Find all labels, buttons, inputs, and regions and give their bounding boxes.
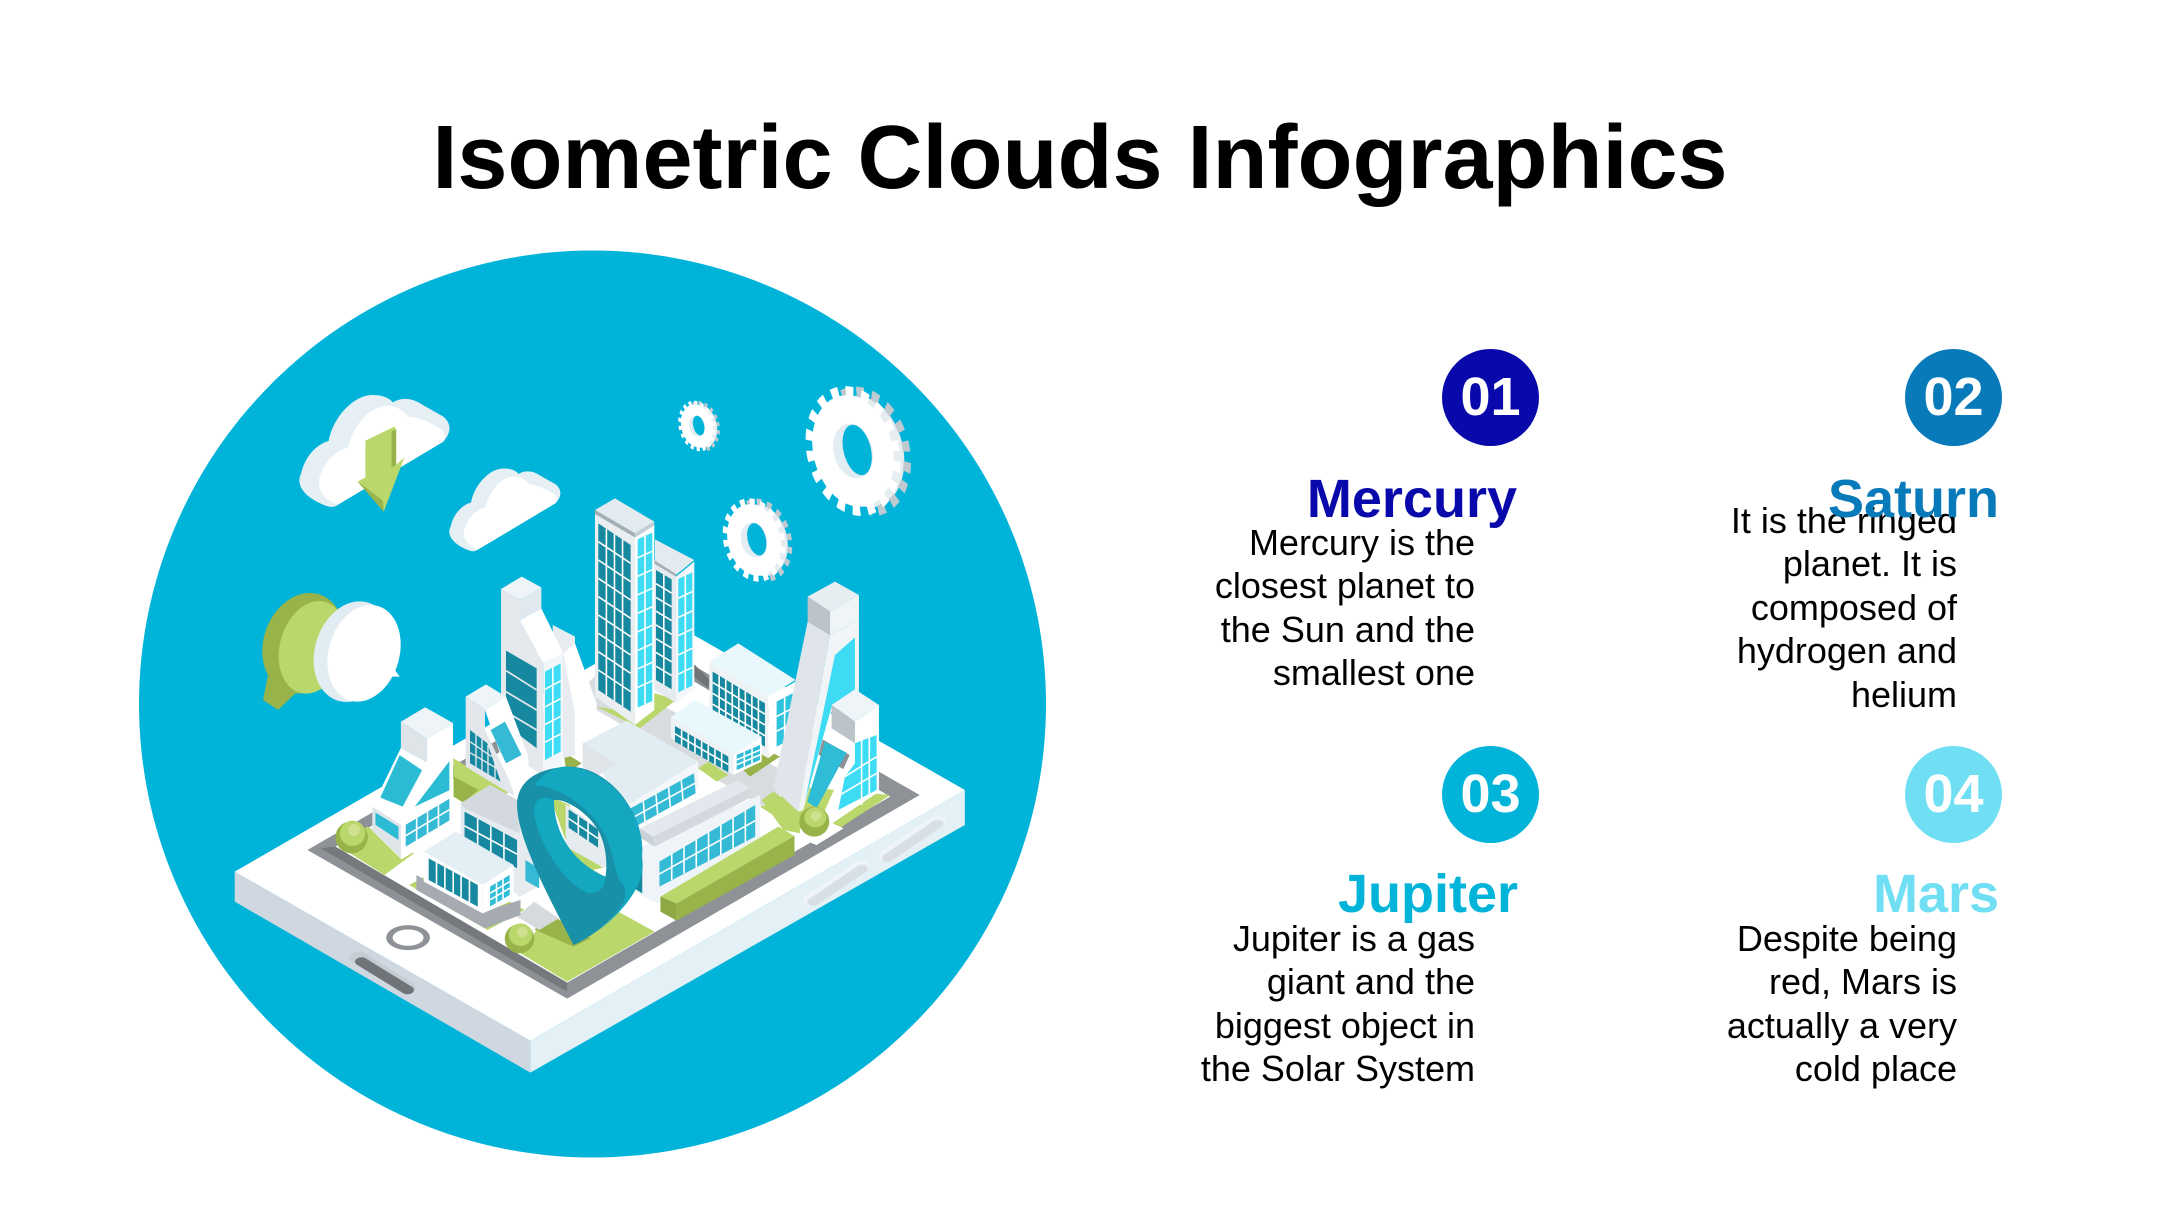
body: Saturn: hydrogen and bbox=[1737, 630, 1957, 671]
icon: tree right bbox=[799, 807, 829, 837]
building: main skyscraper bbox=[595, 498, 654, 725]
icon: tablet device bbox=[235, 621, 965, 1073]
heading: Jupiter: Jupiter bbox=[1338, 864, 1518, 924]
icon: medium gear bbox=[722, 498, 792, 582]
number badge 03: 03 bbox=[1460, 764, 1521, 824]
body: Saturn: It is the ringed bbox=[1731, 500, 1957, 541]
icon: location pin bbox=[517, 767, 643, 945]
illustration: isometric city on a phone inside a blue circle bbox=[139, 250, 1046, 1158]
number badge 02 bbox=[1905, 349, 2002, 446]
panel: 02 Saturn bbox=[1731, 349, 2002, 715]
building: right leaning tower bbox=[773, 582, 859, 812]
number badge 03 bbox=[1442, 746, 1539, 843]
body: Mercury: the Sun and the bbox=[1221, 609, 1475, 650]
building: left block with gray roof bbox=[461, 785, 539, 897]
icon: cloud with download arrow bbox=[299, 395, 449, 512]
building: block seen through the pin bbox=[550, 797, 608, 880]
blue background circle bbox=[139, 250, 1046, 1158]
body: Saturn: helium bbox=[1851, 674, 1957, 715]
icon: small gear bbox=[678, 400, 720, 452]
body: Mercury: smallest one bbox=[1273, 652, 1475, 693]
body: Mars: Despite being bbox=[1737, 918, 1957, 959]
body: Mars: red, Mars is bbox=[1769, 961, 1957, 1002]
body: Jupiter: Jupiter is a gas bbox=[1233, 918, 1475, 959]
icon: large gear bbox=[806, 386, 911, 516]
building: right small tower bbox=[807, 689, 879, 825]
ground: lawns and streets bbox=[337, 787, 890, 982]
body: Mercury bbox=[1215, 522, 1475, 693]
heading: Mercury: Mercury bbox=[1307, 469, 1517, 529]
building: rear slab bbox=[709, 643, 796, 758]
body: Saturn: composed of bbox=[1751, 587, 1957, 628]
building: second skyscraper bbox=[654, 539, 694, 703]
panel: 03 Jupiter bbox=[1201, 746, 1539, 1089]
building: far left tower bbox=[372, 707, 453, 859]
title: Isometric Clouds Infographics bbox=[432, 108, 1728, 208]
number badge 04: 04 bbox=[1923, 764, 1984, 824]
body: Jupiter: biggest object in bbox=[1215, 1005, 1475, 1046]
building: mid low block bbox=[671, 700, 762, 775]
body: Saturn bbox=[1731, 500, 1958, 715]
icon: speech bubbles bbox=[254, 589, 409, 710]
panel: 04 Mars bbox=[1727, 746, 2002, 1089]
body: Mars bbox=[1727, 918, 1957, 1089]
building: long front block bbox=[630, 780, 760, 903]
heading: Saturn: Saturn bbox=[1828, 469, 1999, 529]
hedge bbox=[660, 827, 794, 921]
number badge 04 bbox=[1905, 746, 2002, 843]
building: small left tower bbox=[466, 684, 528, 797]
body: Jupiter: giant and the bbox=[1267, 961, 1475, 1002]
icon: trees left and front bbox=[335, 821, 534, 953]
number badge 02: 02 bbox=[1923, 367, 1984, 427]
panel: 01 Mercury bbox=[1215, 349, 1539, 693]
building: small front block bbox=[416, 832, 520, 928]
heading: Mars: Mars bbox=[1873, 864, 1999, 924]
icon: cloud bbox=[449, 468, 560, 551]
building: central roofed block bbox=[583, 721, 698, 830]
body: Mars: cold place bbox=[1795, 1048, 1957, 1089]
body: Mercury: Mercury is the bbox=[1249, 522, 1475, 563]
body: Mercury: closest planet to bbox=[1215, 565, 1475, 606]
building: angled tower bbox=[501, 577, 597, 776]
number badge 01: 01 bbox=[1460, 367, 1521, 427]
body: Jupiter bbox=[1201, 918, 1475, 1089]
body: Mars: actually a very bbox=[1727, 1005, 1957, 1046]
body: Saturn: planet. It is bbox=[1783, 543, 1957, 584]
body: Jupiter: the Solar System bbox=[1201, 1048, 1475, 1089]
number badge 01 bbox=[1442, 349, 1539, 446]
